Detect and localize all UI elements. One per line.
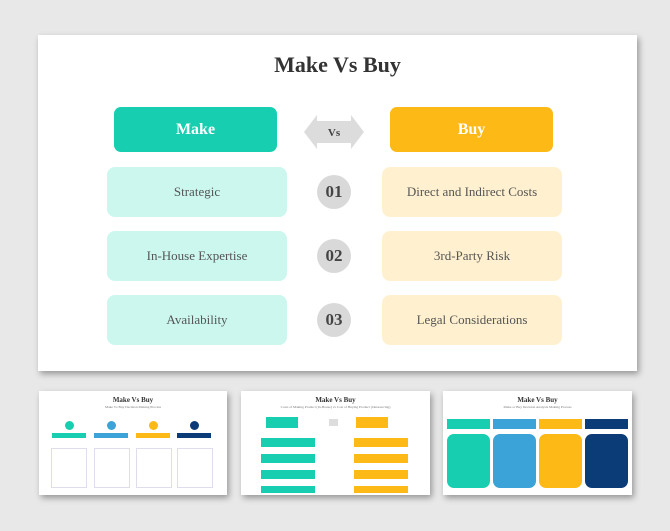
row 3 buy: Legal Considerations [417, 312, 527, 327]
header: make: Make [176, 120, 215, 138]
title: Make Vs Buy [274, 52, 401, 77]
number 03: 03 [326, 310, 342, 329]
thumbnail 2: Costs of Making Product (In-House) vs Cost of Buying Product (Outsourcing) [281, 405, 390, 409]
thumbnail 3 [443, 391, 632, 495]
header: buy [390, 107, 553, 152]
thumbnail 2: Make Vs Buy [315, 396, 356, 404]
row 1 buy [382, 167, 562, 217]
header: make [114, 107, 277, 152]
number 01 [317, 175, 351, 209]
row 2 buy [382, 231, 562, 281]
number 02 [317, 239, 351, 273]
header: buy: Buy [458, 120, 485, 138]
arrow: vs: Vs [328, 127, 341, 139]
row 1 make: Strategic [174, 184, 220, 199]
arrow: vs [304, 115, 364, 149]
number 01: 01 [326, 182, 342, 201]
row 3 make: Availability [166, 312, 228, 327]
row 3 make [107, 295, 287, 345]
thumbnail 1: Make Vs Buy [113, 396, 153, 404]
row 3 buy [382, 295, 562, 345]
thumbnail 2 [241, 391, 430, 495]
row 1 buy: Direct and Indirect Costs [407, 184, 537, 199]
row 1 make [107, 167, 287, 217]
thumbnail 3: Make or Buy Decision Analysis Making Process [503, 405, 572, 409]
thumbnail 1: Make Vs Buy Decision Making Process [105, 405, 161, 409]
row 2 make: In-House Expertise [147, 248, 247, 263]
thumbnail 1 [39, 391, 227, 495]
number 03 [317, 303, 351, 337]
row 2 make [107, 231, 287, 281]
main slide [38, 35, 637, 371]
thumbnail 3: Make Vs Buy [517, 396, 558, 404]
number 02: 02 [326, 246, 342, 265]
row 2 buy: 3rd-Party Risk [434, 248, 510, 263]
